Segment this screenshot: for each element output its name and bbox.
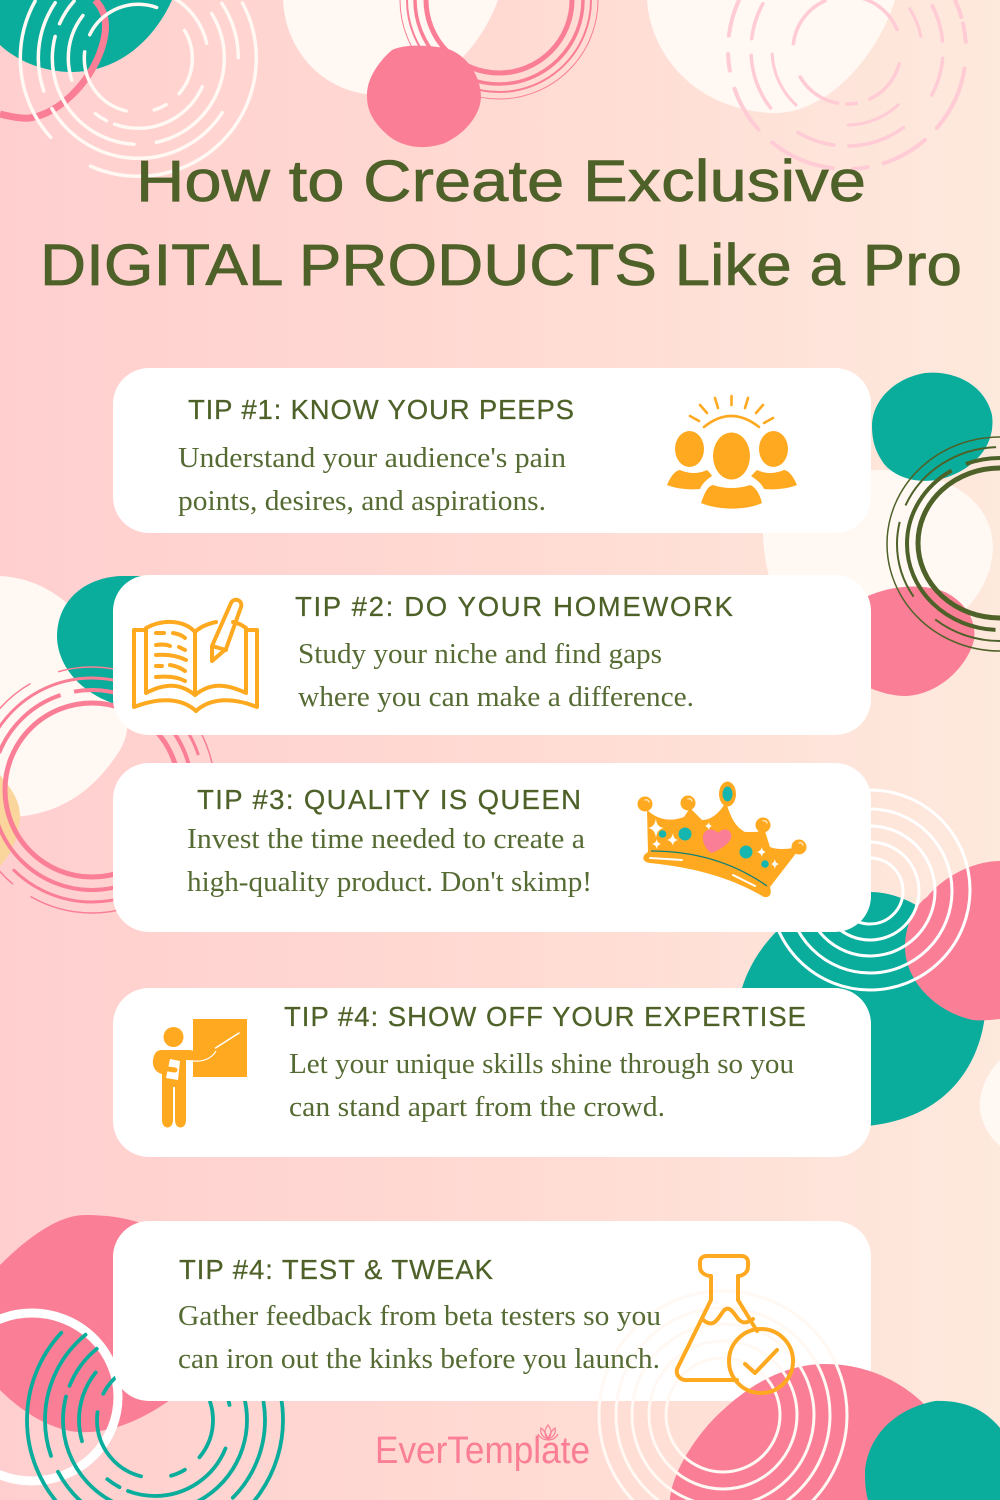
text: tip 3 body [187,823,592,898]
logo: EverTemplate [375,1430,590,1472]
text: tip 4 body: Let your unique skills shine through so you [289,1048,794,1080]
heading: tip 5: TIP #4: TEST & TWEAK [179,1254,494,1285]
decoration: lower right blobs and white rings [742,790,1000,1146]
panel: tip 4 [113,988,871,1157]
text: tip 3 body: Invest the time needed to create a [187,823,585,855]
panel: tip 5 [113,1221,871,1401]
decoration: left side blobs and pink rings [0,576,215,913]
text: tip 2 body [298,638,694,713]
text: tip 5 body: can iron out the kinks before you launch. [178,1343,660,1375]
text: tip 2 body: where you can make a difference. [298,681,694,713]
text: tip 1 body: points, desires, and aspirations. [178,485,546,517]
title: How to Create Exclusive [136,149,866,214]
decoration: top centre blob and pink circle [283,0,598,147]
icon: lotus [538,1425,558,1440]
text: tip 4 body [289,1048,794,1123]
decoration: top right blob and light rings [647,0,966,169]
icon: teacher at board [153,1019,247,1128]
text: tip 5 body [178,1300,661,1375]
icon: crown [638,782,806,897]
text: tip 3 body: high-quality product. Don't skimp! [187,866,592,898]
icon: flask with check [677,1256,793,1393]
text: tip 2 body: Study your niche and find gaps [298,638,662,670]
icon: book and pencil [134,600,257,711]
decoration: lower left blob and rings [0,1215,283,1500]
title [40,149,962,298]
heading: tip 1: TIP #1: KNOW YOUR PEEPS [188,394,574,425]
panel: tip 2 [113,575,871,735]
heading: tip 2: TIP #2: DO YOUR HOMEWORK [295,591,734,622]
heading: tip 4: TIP #4: SHOW OFF YOUR EXPERTISE [284,1001,806,1032]
text: tip 1 body: Understand your audience's pain [178,442,567,474]
text: tip 5 body: Gather feedback from beta testers so you [178,1300,661,1332]
decoration: right side blobs and olive rings [763,373,1000,696]
heading: tip 3: TIP #3: QUALITY IS QUEEN [197,784,581,815]
decoration: bottom right blobs and rings [599,1291,1000,1500]
decoration: top left blobs and rings [0,0,256,176]
icon: audience [667,396,797,509]
panel: tip 3 [113,763,871,932]
text: tip 1 body [178,442,567,517]
title: DIGITAL PRODUCTS Like a Pro [40,233,962,298]
panel: tip 1 [113,368,871,533]
text: tip 4 body: can stand apart from the crowd. [289,1091,665,1123]
